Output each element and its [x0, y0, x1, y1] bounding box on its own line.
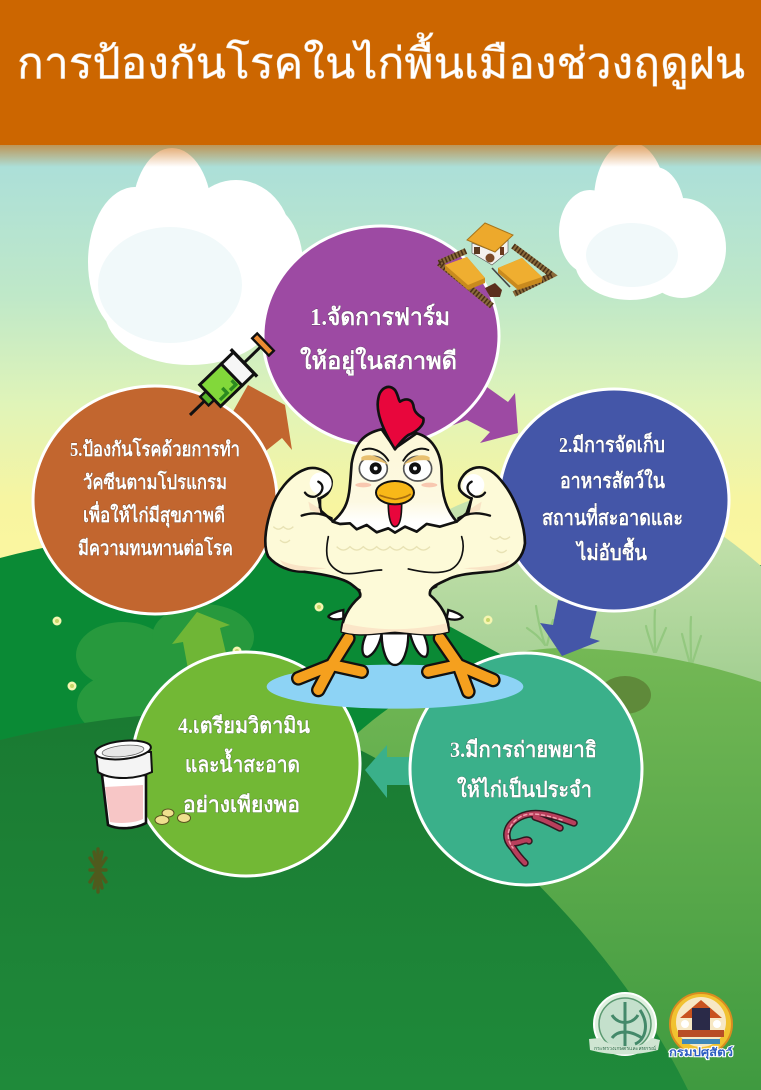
title banner: [0, 0, 761, 145]
dark plant sprig: [90, 849, 106, 892]
bush silhouette: [76, 604, 254, 735]
circle 4 green: [132, 652, 360, 876]
pond: [267, 665, 523, 709]
circle 5 orange: เพื่อให้ไก่มีสุขภาพดี: [83, 500, 225, 528]
circle 4 green: 4.เตรียมวิตามิน: [178, 713, 310, 738]
mid green hill: [345, 648, 761, 1090]
grass tufts: [527, 606, 701, 664]
cloud left: [88, 148, 303, 365]
logo: livestock department seal: [669, 993, 733, 1060]
cloud right: [559, 142, 726, 300]
circle 4 green: และน้ำสะอาด: [185, 748, 300, 777]
circle 5 orange: 5.ป้องกันโรคด้วยการทำ: [70, 437, 240, 461]
arrow: purple: [430, 387, 518, 443]
logo: ministry seal: [589, 993, 660, 1055]
logo: ministry seal: กระทรวงเกษตรและสหกรณ์: [594, 1045, 656, 1052]
mound shadow: [599, 676, 651, 714]
circle 4 green: อย่างเพียงพอ: [183, 792, 300, 817]
arrow: orange: [200, 385, 292, 500]
arrow: teal: [365, 745, 415, 798]
circle 2 blue: สถานที่สะอาดและ: [542, 502, 683, 530]
circle 2 blue: 2.มีการจัดเก็บ: [559, 431, 665, 457]
arrow: green: [172, 612, 230, 680]
icon: farm: [439, 223, 552, 306]
chicken head: [333, 429, 457, 533]
chicken mascot and pond: [265, 387, 525, 709]
circle 2 blue: ไม่อับชื้น: [575, 537, 648, 565]
chicken body: [265, 467, 525, 634]
circle 3 teal: ให้ไก่เป็นประจำ: [457, 775, 592, 802]
chicken wattle: [388, 504, 402, 527]
title banner: การป้องกันโรคในไก่พื้นเมืองช่วงฤดูฝน: [17, 32, 745, 90]
small flowers: [52, 602, 492, 690]
chicken eyes: [355, 449, 437, 487]
chicken legs and feet: [298, 638, 493, 692]
icon: worm: [507, 813, 574, 863]
icon: syringe: [177, 328, 279, 429]
circle 5 orange: มีความทนทานต่อโรค: [78, 536, 233, 560]
circle 5 orange: วัคซีนตามโปรแกรม: [83, 470, 227, 494]
circle 2 blue: อาหารสัตว์ใน: [560, 468, 666, 493]
arrow: blue: [540, 600, 600, 656]
chicken comb: [378, 387, 424, 449]
circle 1 purple: [263, 226, 499, 446]
chicken fists: [302, 472, 490, 518]
tail feathers: [328, 610, 463, 665]
front dark green hill: [0, 713, 688, 1090]
circle 1 purple: 1.จัดการฟาร์ม: [310, 303, 450, 331]
circle 2 blue: [499, 389, 729, 611]
circle 3 teal: [410, 653, 642, 885]
light back hill: [420, 484, 761, 720]
circle 1 purple: ให้อยู่ในสภาพดี: [300, 346, 457, 376]
icon: vitamin bottle and pills: [94, 738, 190, 828]
banner shadow: [0, 145, 761, 167]
chicken beak: [376, 481, 414, 504]
background sky: [0, 145, 761, 565]
logo: livestock department seal: กรมปศุสัตว์: [669, 1046, 733, 1060]
dark green hill: [0, 533, 520, 900]
circle 5 orange: [33, 386, 277, 614]
circle 3 teal: 3.มีการถ่ายพยาธิ: [450, 737, 597, 762]
